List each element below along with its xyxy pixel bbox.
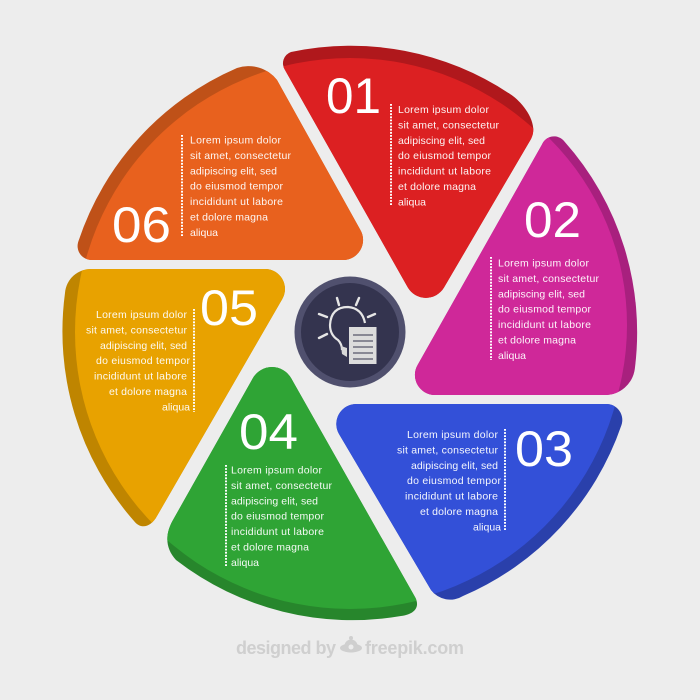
- text block 03: Lorem ipsum dolor: [407, 429, 498, 441]
- icon: light rays: [319, 298, 375, 338]
- text block 05: incididunt ut labore: [94, 371, 187, 383]
- dotted divider 05: [193, 309, 195, 412]
- text block 06: do eiusmod tempor: [190, 181, 284, 193]
- panel 03 side edge: [336, 404, 622, 600]
- dotted divider 02: [490, 257, 492, 360]
- text block 03: et dolore magna: [420, 506, 498, 518]
- dotted divider 03: [504, 429, 506, 531]
- panel 02 side edge: [415, 136, 637, 395]
- text block 02: et dolore magna: [498, 334, 576, 346]
- text block 06: et dolore magna: [190, 212, 268, 224]
- text block 01: incididunt ut labore: [398, 166, 491, 178]
- text block 04: incididunt ut labore: [231, 526, 324, 538]
- text block 02: do eiusmod tempor: [498, 304, 592, 316]
- text block 05: [86, 309, 190, 413]
- text block 01: [398, 104, 500, 208]
- text block 04: [231, 464, 332, 569]
- text block 01: sit amet, consectetur: [398, 119, 500, 131]
- number 03: 03: [515, 421, 573, 477]
- text block 03: incididunt ut labore: [405, 491, 498, 503]
- text block 05: et dolore magna: [109, 386, 187, 398]
- panel: 04 green: [167, 367, 418, 620]
- panel: 01 red: [282, 46, 534, 298]
- footer: freepik credit: [236, 636, 464, 658]
- dotted divider 01: [390, 104, 392, 206]
- text block 04: adipiscing elit, sed: [231, 495, 318, 507]
- panel: 06 orange: [78, 66, 364, 260]
- text block 05: sit amet, consectetur: [86, 324, 188, 336]
- credit text left: designed by: [236, 638, 336, 658]
- text block 01: et dolore magna: [398, 181, 476, 193]
- text block 03: [397, 429, 502, 533]
- text block 06: adipiscing elit, sed: [190, 165, 277, 177]
- text block 02: [498, 258, 600, 362]
- panel 01 side edge: [283, 46, 533, 298]
- icon: bulb base: [341, 346, 347, 357]
- text block 04: do eiusmod tempor: [231, 511, 324, 523]
- panel 06 face: [86, 71, 364, 260]
- panel 01 face: [283, 58, 534, 298]
- panel: 03 blue: [336, 404, 622, 600]
- center icon: lightbulb with document: [294, 276, 406, 388]
- panel 04 side edge: [167, 367, 417, 620]
- icon: freepik mascot: [340, 636, 362, 652]
- text block 04: aliqua: [231, 557, 259, 569]
- text block 06: Lorem ipsum dolor: [190, 134, 282, 146]
- panel: 05 yellow: [62, 269, 285, 526]
- text block 03: sit amet, consectetur: [397, 444, 498, 456]
- text block 02: incididunt ut labore: [498, 319, 591, 331]
- text block 01: Lorem ipsum dolor: [398, 104, 490, 116]
- dotted divider 06: [181, 135, 183, 236]
- text block 05: adipiscing elit, sed: [100, 340, 187, 352]
- number 04: 04: [239, 404, 298, 460]
- text block 03: adipiscing elit, sed: [411, 460, 498, 472]
- text block 02: adipiscing elit, sed: [498, 288, 585, 300]
- text block 05: do eiusmod tempor: [96, 355, 190, 367]
- panel: 02 magenta: [414, 136, 638, 395]
- panel 05 side edge: [62, 269, 285, 526]
- center badge: [294, 276, 406, 388]
- panel 04 face: [167, 367, 417, 609]
- number 06: 06: [112, 197, 171, 253]
- text block 02: sit amet, consectetur: [498, 273, 600, 285]
- text block 02: Lorem ipsum dolor: [498, 258, 590, 270]
- text block 04: et dolore magna: [231, 542, 309, 554]
- text block 04: Lorem ipsum dolor: [231, 464, 322, 476]
- panel 05 face: [75, 269, 285, 522]
- text block 06: incididunt ut labore: [190, 196, 283, 208]
- text block 04: sit amet, consectetur: [231, 480, 332, 492]
- text block 06: [190, 134, 292, 239]
- text block 01: do eiusmod tempor: [398, 150, 492, 162]
- text block 03: aliqua: [473, 521, 501, 533]
- icon: document: [349, 327, 376, 364]
- text block 05: Lorem ipsum dolor: [96, 309, 188, 321]
- number 05: 05: [200, 280, 258, 336]
- text block 06: aliqua: [190, 227, 218, 239]
- panel 03 face: [336, 404, 615, 594]
- text block 01: adipiscing elit, sed: [398, 135, 485, 147]
- text block 03: do eiusmod tempor: [407, 475, 502, 487]
- dotted divider 04: [225, 465, 227, 567]
- text block 02: aliqua: [498, 350, 526, 362]
- text block 05: aliqua: [162, 401, 190, 413]
- text block 01: aliqua: [398, 196, 426, 208]
- credit text right: freepik.com: [365, 638, 464, 658]
- panel 02 face: [414, 138, 627, 395]
- panel 06 side edge: [78, 66, 363, 260]
- icon: bulb outline: [330, 307, 365, 350]
- number 01: 01: [326, 68, 381, 124]
- text block 06: sit amet, consectetur: [190, 150, 292, 162]
- number 02: 02: [524, 192, 581, 248]
